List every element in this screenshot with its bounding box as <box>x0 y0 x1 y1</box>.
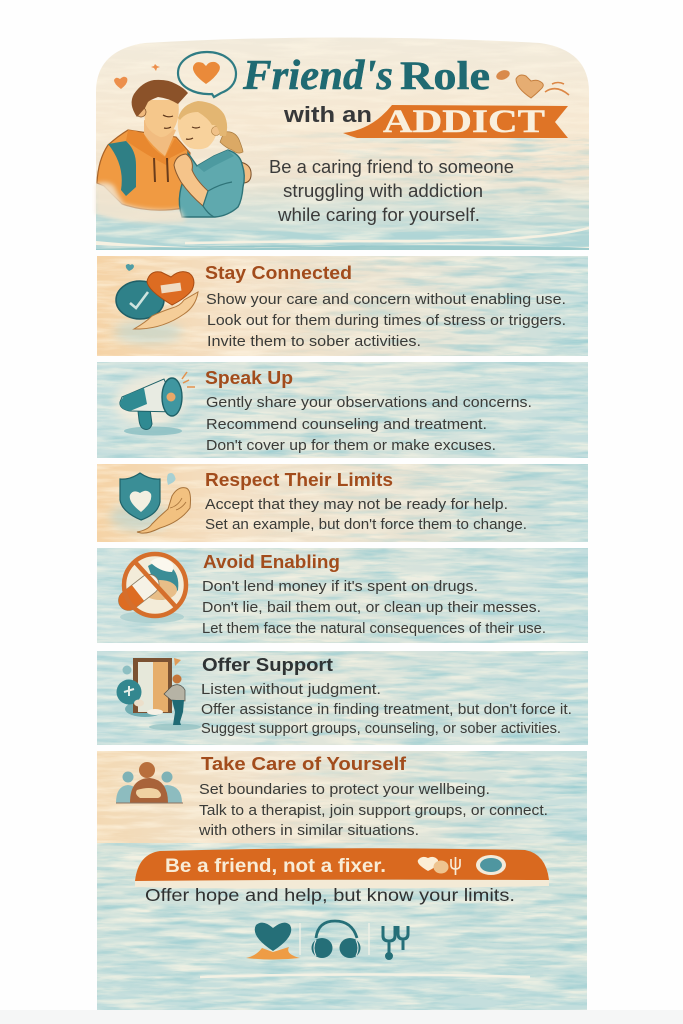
icon: heart in hand <box>114 264 198 344</box>
body text: Don't lie, bail them out, or clean up their messes. <box>202 600 541 616</box>
title: Friend's Role: Role <box>400 53 490 98</box>
heading: Stay Connected <box>205 263 352 283</box>
body text: Don't lend money if it's spent on drugs. <box>202 579 478 595</box>
man's hoodie <box>97 130 190 210</box>
body text: Let them face the natural consequences of their use. <box>202 621 546 637</box>
body text: with others in similar situations. <box>198 823 419 839</box>
body text: Suggest support groups, counseling, or sober activities. <box>201 721 561 737</box>
body text: Set an example, but don't force them to change. <box>205 517 527 533</box>
tagline <box>269 157 514 225</box>
man's neck <box>144 120 176 156</box>
body text: Accept that they may not be ready for help. <box>205 497 508 513</box>
body text <box>206 395 532 454</box>
heading: Take Care of Yourself <box>201 754 407 774</box>
ribbon: ADDICT <box>343 104 568 140</box>
body text <box>202 579 546 637</box>
panel: closing section <box>97 840 587 1010</box>
woman's ponytail <box>220 132 243 153</box>
banner: be a friend: Be a friend, not a fixer. <box>165 856 386 877</box>
woman's hoodie <box>179 150 244 217</box>
icon: tuning forks <box>383 926 408 958</box>
ribbon: ADDICT: ADDICT <box>383 104 545 140</box>
icon: open door with person <box>116 658 201 730</box>
body text <box>198 782 548 839</box>
body text: Gently share your observations and concerns. <box>206 395 532 411</box>
heading: Avoid Enabling <box>203 552 340 572</box>
panel: respect their limits <box>97 464 588 542</box>
man's hair <box>132 80 188 117</box>
tagline: Be a caring friend to someone <box>269 157 514 177</box>
heading: Offer Support <box>202 655 333 675</box>
body text: Set boundaries to protect your wellbeing. <box>199 782 490 798</box>
man's head <box>143 100 179 137</box>
header background <box>96 38 589 250</box>
body text: Recommend counseling and treatment. <box>206 417 487 433</box>
hood collar <box>126 130 186 165</box>
woman's head <box>178 104 218 149</box>
illustration: friends embracing <box>97 80 251 217</box>
closing line: Offer hope and help, but know your limits. <box>145 885 515 905</box>
icon: group of people <box>116 762 183 803</box>
clasped hand and arm <box>174 154 208 206</box>
icon: shield and hand <box>110 473 190 533</box>
body text: Listen without judgment. <box>201 682 381 698</box>
subtitle: with an: with an <box>283 102 372 127</box>
body text: Talk to a therapist, join support groups, or connect. <box>199 803 548 819</box>
body text: Don't cover up for them or make excuses. <box>206 438 496 454</box>
man's hand on shoulder <box>240 162 251 183</box>
body text: Look out for them during times of stress or triggers. <box>207 313 566 329</box>
body text <box>205 497 527 533</box>
sleeve <box>208 182 232 191</box>
panel: take care of yourself <box>97 751 587 843</box>
body text <box>206 292 566 350</box>
backpack strap <box>108 141 136 196</box>
icon: heart <box>246 923 300 960</box>
speech bubble with heart <box>178 52 236 97</box>
icon: headphones <box>312 921 360 958</box>
heading: Respect Their Limits <box>205 470 393 490</box>
body text: Offer assistance in finding treatment, but don't force it. <box>201 702 572 718</box>
icon: megaphone <box>114 372 195 436</box>
heading: Speak Up <box>205 368 293 388</box>
man's face details <box>163 115 173 128</box>
panel: avoid enabling <box>97 548 588 643</box>
panel: offer support <box>97 651 588 745</box>
icon: no pills <box>115 554 186 623</box>
foam over illustration <box>96 182 186 223</box>
title: Friend's Role <box>242 53 490 99</box>
woman's face details <box>186 127 200 139</box>
small hearts left <box>114 64 160 89</box>
banner icons <box>418 855 506 875</box>
body text <box>201 682 572 737</box>
tagline: struggling with addiction <box>283 181 483 201</box>
footer strip <box>0 1010 683 1024</box>
header panel <box>96 38 589 251</box>
woman's hair <box>178 101 227 136</box>
tagline: while caring for yourself. <box>277 205 480 225</box>
decorative hearts right <box>495 68 569 98</box>
title: Friend's Role: Friend's <box>242 53 393 99</box>
panel: stay connected <box>97 256 588 356</box>
body text: Show your care and concern without enabling use. <box>206 292 566 308</box>
body text: Invite them to sober activities. <box>207 334 421 350</box>
banner: be a friend <box>135 848 549 889</box>
panel: speak up <box>97 362 588 458</box>
